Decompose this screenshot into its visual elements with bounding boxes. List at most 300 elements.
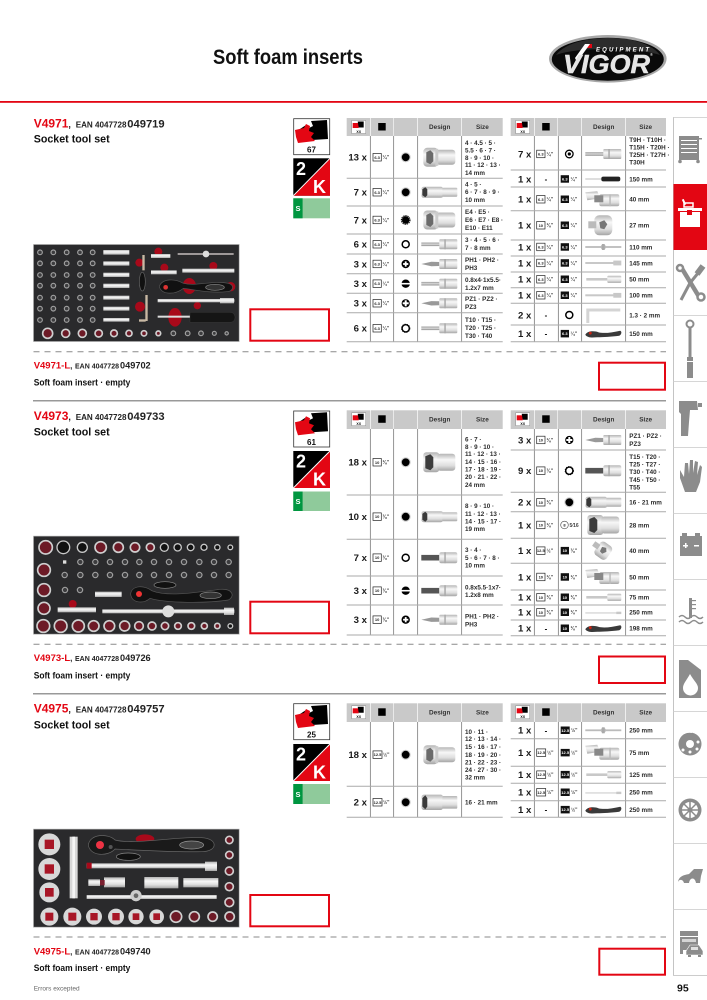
table header: [347, 410, 503, 429]
row: adapter: 1 x: [518, 221, 532, 232]
row: 3 x PZ bits: PZ1 · PZ2 ·: [465, 296, 498, 303]
row: extension 100: ¼": [570, 292, 578, 299]
product code V4975: EAN 4047728: [76, 706, 127, 715]
row: 3 x PZ bits: ¼": [382, 300, 390, 307]
badge: 2K components: 2: [296, 159, 306, 179]
row: 3 x slotted bits: 3 x: [354, 586, 368, 597]
insert description: Soft foam insert · empty: [34, 670, 131, 680]
row: 7 x E sockets: 7 x: [354, 215, 368, 226]
row: 3 x PH bits: PH1 · PH2 ·: [465, 614, 499, 620]
row: 28 mm socket: 1 x: [518, 520, 532, 531]
icon: tool trolley: [678, 136, 702, 163]
row: 10 x deep sockets: 8 · 9 · 10 ·: [465, 503, 494, 510]
sidebar: chapter tabs: [673, 117, 707, 976]
table: V4973 right: [511, 410, 666, 636]
row: extension 100: 6.3: [538, 293, 544, 298]
row: 10 x deep sockets: 19 mm: [465, 526, 485, 533]
logo: Vigor Equipment: VIGOR: [563, 49, 650, 79]
row: ratchet: 1 x: [518, 805, 532, 816]
row: 13 x sockets: 5.5 · 6 · 7 ·: [465, 148, 496, 155]
row: 18 x sockets: 18 x: [348, 750, 368, 761]
row: 7 x TH bits: T9H · T10H ·: [629, 137, 666, 144]
icon: gloves: [680, 460, 702, 492]
row: 28 mm socket: 5⁄16: [570, 523, 579, 529]
insert code V4971-L: V4971-L,: [34, 360, 72, 371]
row: ratchet: 6.3: [562, 331, 568, 336]
row: 18 x sockets: 10: [375, 460, 380, 465]
table header: [347, 118, 503, 136]
row: 7 x hex bits: 5 · 6 · 7 · 8 ·: [465, 555, 500, 562]
badge: pieces 67: 67: [307, 146, 316, 154]
row: 18 x sockets: ½": [383, 752, 390, 759]
row: extension 75: [518, 593, 650, 604]
row: 18 x sockets: 17 · 18 · 19 ·: [465, 466, 501, 474]
row: adapter: ⅜": [570, 549, 578, 555]
table header: XX: [356, 422, 362, 426]
row: 7 x deep sockets: [354, 182, 500, 204]
insert code V4973-L: 049726: [120, 653, 151, 663]
row: 3 x PZ bits: 3 x: [518, 435, 532, 446]
product code V4973: V4973,: [34, 409, 71, 423]
row: ratchet: -: [545, 624, 548, 633]
badge: pieces 25: [294, 704, 330, 740]
section: V4971: [33, 116, 670, 390]
row: 13 x sockets: 4 · 4.5 · 5 ·: [465, 140, 496, 147]
badge: pieces 61: [294, 411, 330, 447]
badge: pieces 67: [294, 119, 330, 155]
row: 18 x sockets: [348, 436, 501, 489]
badge: S rating: [293, 198, 330, 218]
photo: V4973 foam tray: [33, 536, 239, 634]
row: ratchet: [518, 329, 653, 340]
table header: Size: [639, 124, 653, 131]
row: 3 x PZ bits: PZ1 · PZ2 ·: [629, 433, 662, 440]
badge: pieces 25: 25: [307, 730, 316, 740]
dashed divider: [34, 936, 666, 938]
badge: pieces 61: 61: [307, 438, 316, 447]
row: universal joint: ⅜": [570, 575, 578, 581]
row: extension 100: 6.3: [562, 293, 568, 298]
icon: wrench and screwdriver: [677, 265, 704, 300]
row: ratchet: [518, 805, 653, 816]
row: 3 x PH bits: [354, 257, 499, 272]
row: 7 x TH bits: 7 x: [518, 149, 532, 160]
row: adapter: 40 mm: [629, 548, 650, 555]
row: 13 x sockets: 14 mm: [465, 170, 485, 177]
row: 28 mm socket: 8: [563, 522, 566, 528]
row: 7 x hex bits: 3 · 4 ·: [465, 547, 481, 554]
table header: Size: [476, 416, 489, 423]
row: 3 x PH bits: 3 x: [354, 259, 368, 270]
row: extension 250: ½": [547, 789, 554, 796]
row: extension 50: 50 mm: [629, 277, 650, 284]
row: extension 145: 6.3: [562, 260, 568, 266]
empty red price box small: [599, 949, 665, 975]
row: extension 250: 10: [563, 610, 568, 615]
row: adapter: 27 mm: [629, 223, 650, 230]
icon: battery: [680, 533, 702, 556]
product code V4971: 049719: [127, 118, 165, 130]
row: extension 125: 1 x: [518, 770, 532, 781]
table header: Design: [593, 124, 614, 131]
row: universal joint: 40 mm: [629, 197, 650, 204]
row: extension 125: ½": [547, 772, 554, 779]
table header: [511, 118, 666, 136]
row: extension 145: 1 x: [518, 258, 532, 269]
row: 7 x deep sockets: 10 mm: [465, 197, 485, 204]
badge: S rating: S: [296, 204, 301, 213]
row: sliding T bar: 250 mm: [629, 728, 653, 735]
row: universal joint: 1 x: [518, 748, 532, 759]
row: sliding T bar: 110 mm: [629, 244, 653, 251]
row: extension 125: 12.5: [537, 772, 546, 777]
icon: torque wrench: [686, 320, 694, 378]
row: ratchet: 1 x: [518, 624, 532, 635]
row: hex keys: 1.3 · 2 mm: [629, 312, 660, 319]
row: 7 x E sockets: E10 · E11: [465, 225, 493, 232]
row: 6 x Torx bits: 6.3: [374, 326, 381, 331]
row: 3 x PH bits: PH1 · PH2 ·: [465, 257, 499, 264]
logo: Vigor Equipment: EQUIPMENT: [596, 48, 650, 54]
row: 9 x Torx bits: T30 · T40 ·: [629, 469, 660, 476]
row: 18 x sockets: 8 · 9 · 10 ·: [465, 444, 494, 451]
icon: wheel: [678, 798, 702, 822]
row: extension 250: ⅜": [570, 610, 578, 616]
row: screwdriver: [518, 174, 653, 185]
row: extension 100: 100 mm: [629, 293, 653, 300]
empty red price box: [250, 602, 329, 633]
header red rule: [0, 101, 707, 103]
row: 3 x PZ bits: PZ3: [465, 304, 477, 311]
icon: truck and car: [680, 931, 703, 957]
row: 3 x PH bits: ¼": [382, 261, 390, 268]
product code V4971: EAN 4047728: [76, 120, 127, 129]
product name: Socket tool set: [34, 427, 110, 439]
row: 10 x deep sockets: 14 · 15 · 17 ·: [465, 518, 501, 526]
row: 7 x E sockets: ¼": [382, 217, 390, 224]
row: 3 x PZ bits: 10: [539, 438, 544, 442]
row: ratchet: [518, 624, 653, 635]
row: extension 250: 1 x: [518, 608, 532, 619]
row: 28 mm socket: ⅜": [546, 523, 554, 529]
row: screwdriver: -: [545, 175, 548, 184]
row: ratchet: ⅜": [570, 626, 578, 632]
badge: 2K components: K: [313, 470, 326, 490]
row: screwdriver: 6.3: [562, 176, 568, 182]
row: 7 x deep sockets: 6 · 7 · 8 · 9 ·: [465, 189, 500, 196]
row: 6 x hex bits: [354, 237, 500, 252]
badge: 2K components: K: [313, 177, 326, 197]
row: 3 x PZ bits: [354, 296, 498, 311]
insert code V4973-L: EAN 4047728: [75, 656, 119, 663]
row: 9 x Torx bits: 9 x: [518, 466, 532, 477]
row: adapter: 1 x: [518, 546, 532, 557]
row: universal joint: ¼": [546, 196, 554, 203]
row: 7 x E sockets: 6.3: [374, 218, 381, 222]
row: 3 x slotted bits: 6.3: [374, 281, 381, 286]
row: sliding T bar: ½": [571, 727, 578, 734]
table: V4975 left: [347, 703, 503, 818]
table: V4973 left: [347, 410, 503, 635]
row: extension 250: [518, 608, 653, 619]
row: 7 x TH bits: 6.3: [538, 152, 544, 156]
row: 18 x sockets: 24 · 27 · 30 ·: [465, 767, 501, 774]
row: 13 x sockets: 6.3: [374, 155, 381, 160]
row: 18 x sockets: 18 x: [348, 458, 368, 469]
tab: tool boxes active: [674, 184, 707, 250]
insert code V4975-L: EAN 4047728: [75, 949, 119, 956]
table header: XX: [356, 130, 362, 134]
row: universal joint: 10: [539, 574, 544, 580]
row: 6 x hex bits: 6.3: [374, 242, 381, 247]
product code V4973: EAN 4047728: [76, 413, 127, 422]
row: 2 x deep sockets: 2 x: [518, 498, 532, 509]
row: ratchet: ½": [571, 807, 578, 814]
row: extension 75: 75 mm: [629, 595, 650, 602]
row: 9 x Torx bits: T45 · T50 ·: [629, 477, 660, 484]
section divider 2: [33, 693, 666, 694]
footer note: Errors excepted: [34, 986, 80, 992]
row: 13 x sockets: 8 · 9 · 10 ·: [465, 155, 494, 162]
row: 6 x Torx bits: T10 · T15 ·: [465, 317, 496, 324]
row: 2 x deep sockets: [354, 795, 498, 810]
row: 10 x deep sockets: ⅜": [382, 515, 390, 521]
row: ratchet: 10: [563, 626, 568, 631]
row: 13 x sockets: 13 x: [348, 153, 368, 164]
row: ratchet: 198 mm: [629, 626, 653, 633]
row: 6 x hex bits: 3 · 4 · 5 · 6 ·: [465, 237, 500, 244]
row: universal joint: 12.5: [561, 750, 570, 755]
badge: S rating: [293, 492, 330, 511]
badge: S rating: S: [296, 497, 301, 506]
row: 3 x slotted bits: 10: [375, 588, 380, 593]
table header: Design: [429, 124, 450, 131]
row: extension 250: 12.5: [537, 790, 546, 795]
row: universal joint: [518, 569, 650, 584]
row: sliding T bar: 12.5: [561, 728, 570, 733]
row: ratchet: ¼": [570, 331, 578, 338]
product code V4971: V4971,: [34, 116, 71, 130]
row: 3 x slotted bits: ⅜": [382, 589, 390, 595]
product code V4973: 049733: [127, 411, 165, 423]
row: extension 125: 125 mm: [629, 772, 653, 779]
row: 7 x TH bits: T30H: [629, 160, 645, 166]
row: 6 x Torx bits: ¼": [382, 325, 390, 332]
row: 13 x sockets: ¼": [382, 154, 390, 161]
insert description: Soft foam insert · empty: [34, 963, 131, 973]
row: extension 250: 10: [539, 610, 544, 615]
row: 6 x Torx bits: [354, 317, 496, 340]
row: 7 x deep sockets: 7 x: [354, 188, 368, 199]
row: 7 x hex bits: 7 x: [354, 553, 368, 564]
row: 9 x Torx bits: T25 · T27 ·: [629, 462, 660, 468]
page number: 95: [677, 982, 689, 994]
badge: S rating: [293, 784, 330, 804]
row: 18 x sockets: 15 · 16 · 17 ·: [465, 744, 501, 751]
table header: XX: [520, 715, 526, 719]
row: adapter: 6.3: [562, 223, 568, 228]
table header: Size: [476, 124, 489, 131]
row: universal joint: [518, 191, 650, 206]
row: 3 x slotted bits: 1.2x7 mm: [465, 285, 494, 292]
row: 6 x Torx bits: T30 · T40: [465, 333, 493, 340]
dashed divider: [34, 351, 666, 353]
icon: impact wrench: [679, 401, 702, 436]
row: adapter: [518, 537, 650, 561]
row: screwdriver: ¼": [570, 176, 578, 183]
row: universal joint: ½": [571, 750, 578, 757]
table header: Design: [429, 709, 450, 716]
row: extension 125: [518, 770, 653, 781]
row: 2 x deep sockets: 16 · 21 mm: [629, 500, 662, 507]
logo: Vigor Equipment: ®: [650, 52, 653, 57]
row: adapter: 10: [539, 223, 544, 228]
row: 3 x slotted bits: 0.8x4·1x5.5·: [465, 277, 501, 284]
product code V4975: V4975,: [34, 702, 71, 716]
product name: Socket tool set: [34, 134, 110, 146]
row: sliding T bar: [518, 242, 653, 253]
row: extension 75: 10: [539, 595, 544, 600]
row: 28 mm socket: 28 mm: [629, 522, 650, 529]
row: 3 x PH bits: [354, 614, 499, 628]
row: extension 100: ¼": [546, 292, 554, 299]
row: extension 250: 250 mm: [629, 790, 653, 797]
row: 18 x sockets: 12.5: [374, 752, 382, 757]
row: adapter: ¼": [570, 222, 578, 229]
row: 6 x hex bits: 7 · 8 mm: [465, 245, 491, 252]
row: extension 75: 1 x: [518, 593, 532, 604]
insert code V4971-L: 049702: [120, 360, 151, 370]
row: adapter: [518, 215, 650, 235]
row: universal joint: ½": [547, 750, 554, 757]
row: 2 x deep sockets: 16 · 21 mm: [465, 800, 498, 807]
page title: Soft foam inserts: [213, 46, 363, 69]
row: universal joint: 1 x: [518, 195, 532, 206]
row: 7 x TH bits: T15H · T20H ·: [629, 144, 670, 152]
table header: [511, 410, 666, 429]
row: 7 x E sockets: [354, 209, 503, 232]
row: 18 x sockets: 32 mm: [465, 774, 485, 782]
row: 10 x deep sockets: 10: [375, 514, 380, 519]
row: 3 x PZ bits: 3 x: [354, 299, 368, 310]
insert code V4975-L: V4975-L,: [34, 946, 72, 957]
row: extension 50: 6.3: [562, 277, 568, 282]
row: universal joint: 50 mm: [629, 574, 650, 581]
table header: XX: [520, 422, 526, 426]
table header: Design: [593, 416, 614, 423]
insert code V4971-L: EAN 4047728: [75, 363, 119, 370]
row: 7 x hex bits: 10: [375, 555, 380, 560]
row: 6 x Torx bits: T20 · T25 ·: [465, 325, 496, 332]
row: 18 x sockets: 14 · 15 · 16 ·: [465, 459, 501, 466]
row: 28 mm socket: [518, 515, 650, 535]
table: V4975 right: [511, 703, 666, 818]
badge: 2K components: [293, 451, 330, 490]
row: 3 x PZ bits: ⅜": [546, 438, 554, 444]
row: 18 x sockets: 24 mm: [465, 482, 485, 489]
photo: V4971 foam tray: [33, 244, 239, 341]
row: extension 75: ⅜": [570, 595, 578, 601]
row: 3 x PZ bits: PZ3: [629, 441, 641, 448]
row: extension 250: ⅜": [546, 610, 554, 616]
row: sliding T bar: 1 x: [518, 726, 532, 737]
row: extension 145: ¼": [570, 260, 578, 267]
row: adapter: ⅜": [546, 223, 554, 229]
row: sliding T bar: ¼": [546, 244, 554, 251]
row: extension 125: ½": [571, 772, 578, 779]
row: 3 x slotted bits: [354, 277, 501, 292]
row: 3 x slotted bits: 0.8x5.5·1x7·: [465, 584, 501, 592]
insert description: Soft foam insert · empty: [34, 377, 131, 387]
row: ratchet: 250 mm: [629, 807, 653, 814]
table header: Design: [429, 416, 450, 423]
row: hex keys: 2 x: [518, 310, 532, 321]
icon: brake disc: [678, 732, 702, 756]
row: 13 x sockets: [348, 140, 501, 177]
row: universal joint: ¼": [570, 196, 578, 203]
row: universal joint: ⅜": [546, 575, 554, 581]
row: 18 x sockets: 21 · 22 · 23 ·: [465, 760, 501, 766]
table: V4971 left: [347, 118, 503, 342]
row: extension 75: ⅜": [546, 595, 554, 601]
icon: coolant temperature: [679, 598, 703, 624]
row: ratchet: -: [545, 330, 548, 339]
row: 18 x sockets: [348, 729, 501, 782]
row: screwdriver: 1 x: [518, 174, 532, 185]
row: 3 x PZ bits: 6.3: [374, 301, 381, 306]
row: 3 x PH bits: ⅜": [382, 618, 390, 624]
row: extension 125: 12.5: [561, 772, 570, 777]
product code V4975: 049757: [127, 704, 165, 716]
row: extension 145: 6.3: [538, 260, 544, 266]
row: extension 75: 10: [563, 595, 568, 600]
row: 18 x sockets: 10 · 11 ·: [465, 729, 488, 736]
empty red price box: [250, 895, 329, 926]
row: 10 x deep sockets: [348, 503, 501, 533]
row: extension 250: 250 mm: [629, 610, 653, 617]
row: extension 145: [518, 258, 653, 269]
row: 9 x Torx bits: ⅜": [546, 469, 554, 475]
row: 28 mm socket: 10: [539, 522, 544, 528]
row: screwdriver: 150 mm: [629, 176, 653, 183]
table header: XX: [520, 130, 526, 134]
row: ratchet: 12.5: [561, 807, 570, 812]
insert code V4973-L: V4973-L,: [34, 653, 72, 664]
row: 18 x sockets: 6 · 7 ·: [465, 436, 481, 444]
product name: Socket tool set: [34, 719, 110, 731]
row: universal joint: [518, 745, 650, 760]
row: 18 x sockets: 20 · 21 · 22 ·: [465, 474, 501, 481]
row: ratchet: -: [545, 806, 548, 815]
row: universal joint: 75 mm: [629, 750, 650, 757]
section: V4973: [33, 409, 666, 683]
row: universal joint: 6.3: [538, 197, 544, 202]
empty red price box: [250, 309, 329, 341]
table header: Size: [476, 709, 489, 716]
row: 10 x deep sockets: 11 · 12 · 13 ·: [465, 511, 501, 518]
row: 3 x PH bits: PH3: [465, 265, 478, 272]
row: extension 145: ¼": [546, 260, 554, 267]
row: 7 x deep sockets: 4 · 5 ·: [465, 182, 481, 188]
row: 7 x E sockets: E4 · E5 ·: [465, 209, 490, 216]
row: extension 100: [518, 291, 653, 302]
empty red price box small: [599, 656, 665, 683]
row: 3 x PH bits: PH3: [465, 622, 478, 628]
row: extension 50: ¼": [570, 276, 578, 283]
row: 2 x deep sockets: 12.5: [374, 800, 382, 805]
row: 18 x sockets: 12 · 13 · 14 ·: [465, 736, 501, 743]
section divider 1: [33, 400, 666, 402]
